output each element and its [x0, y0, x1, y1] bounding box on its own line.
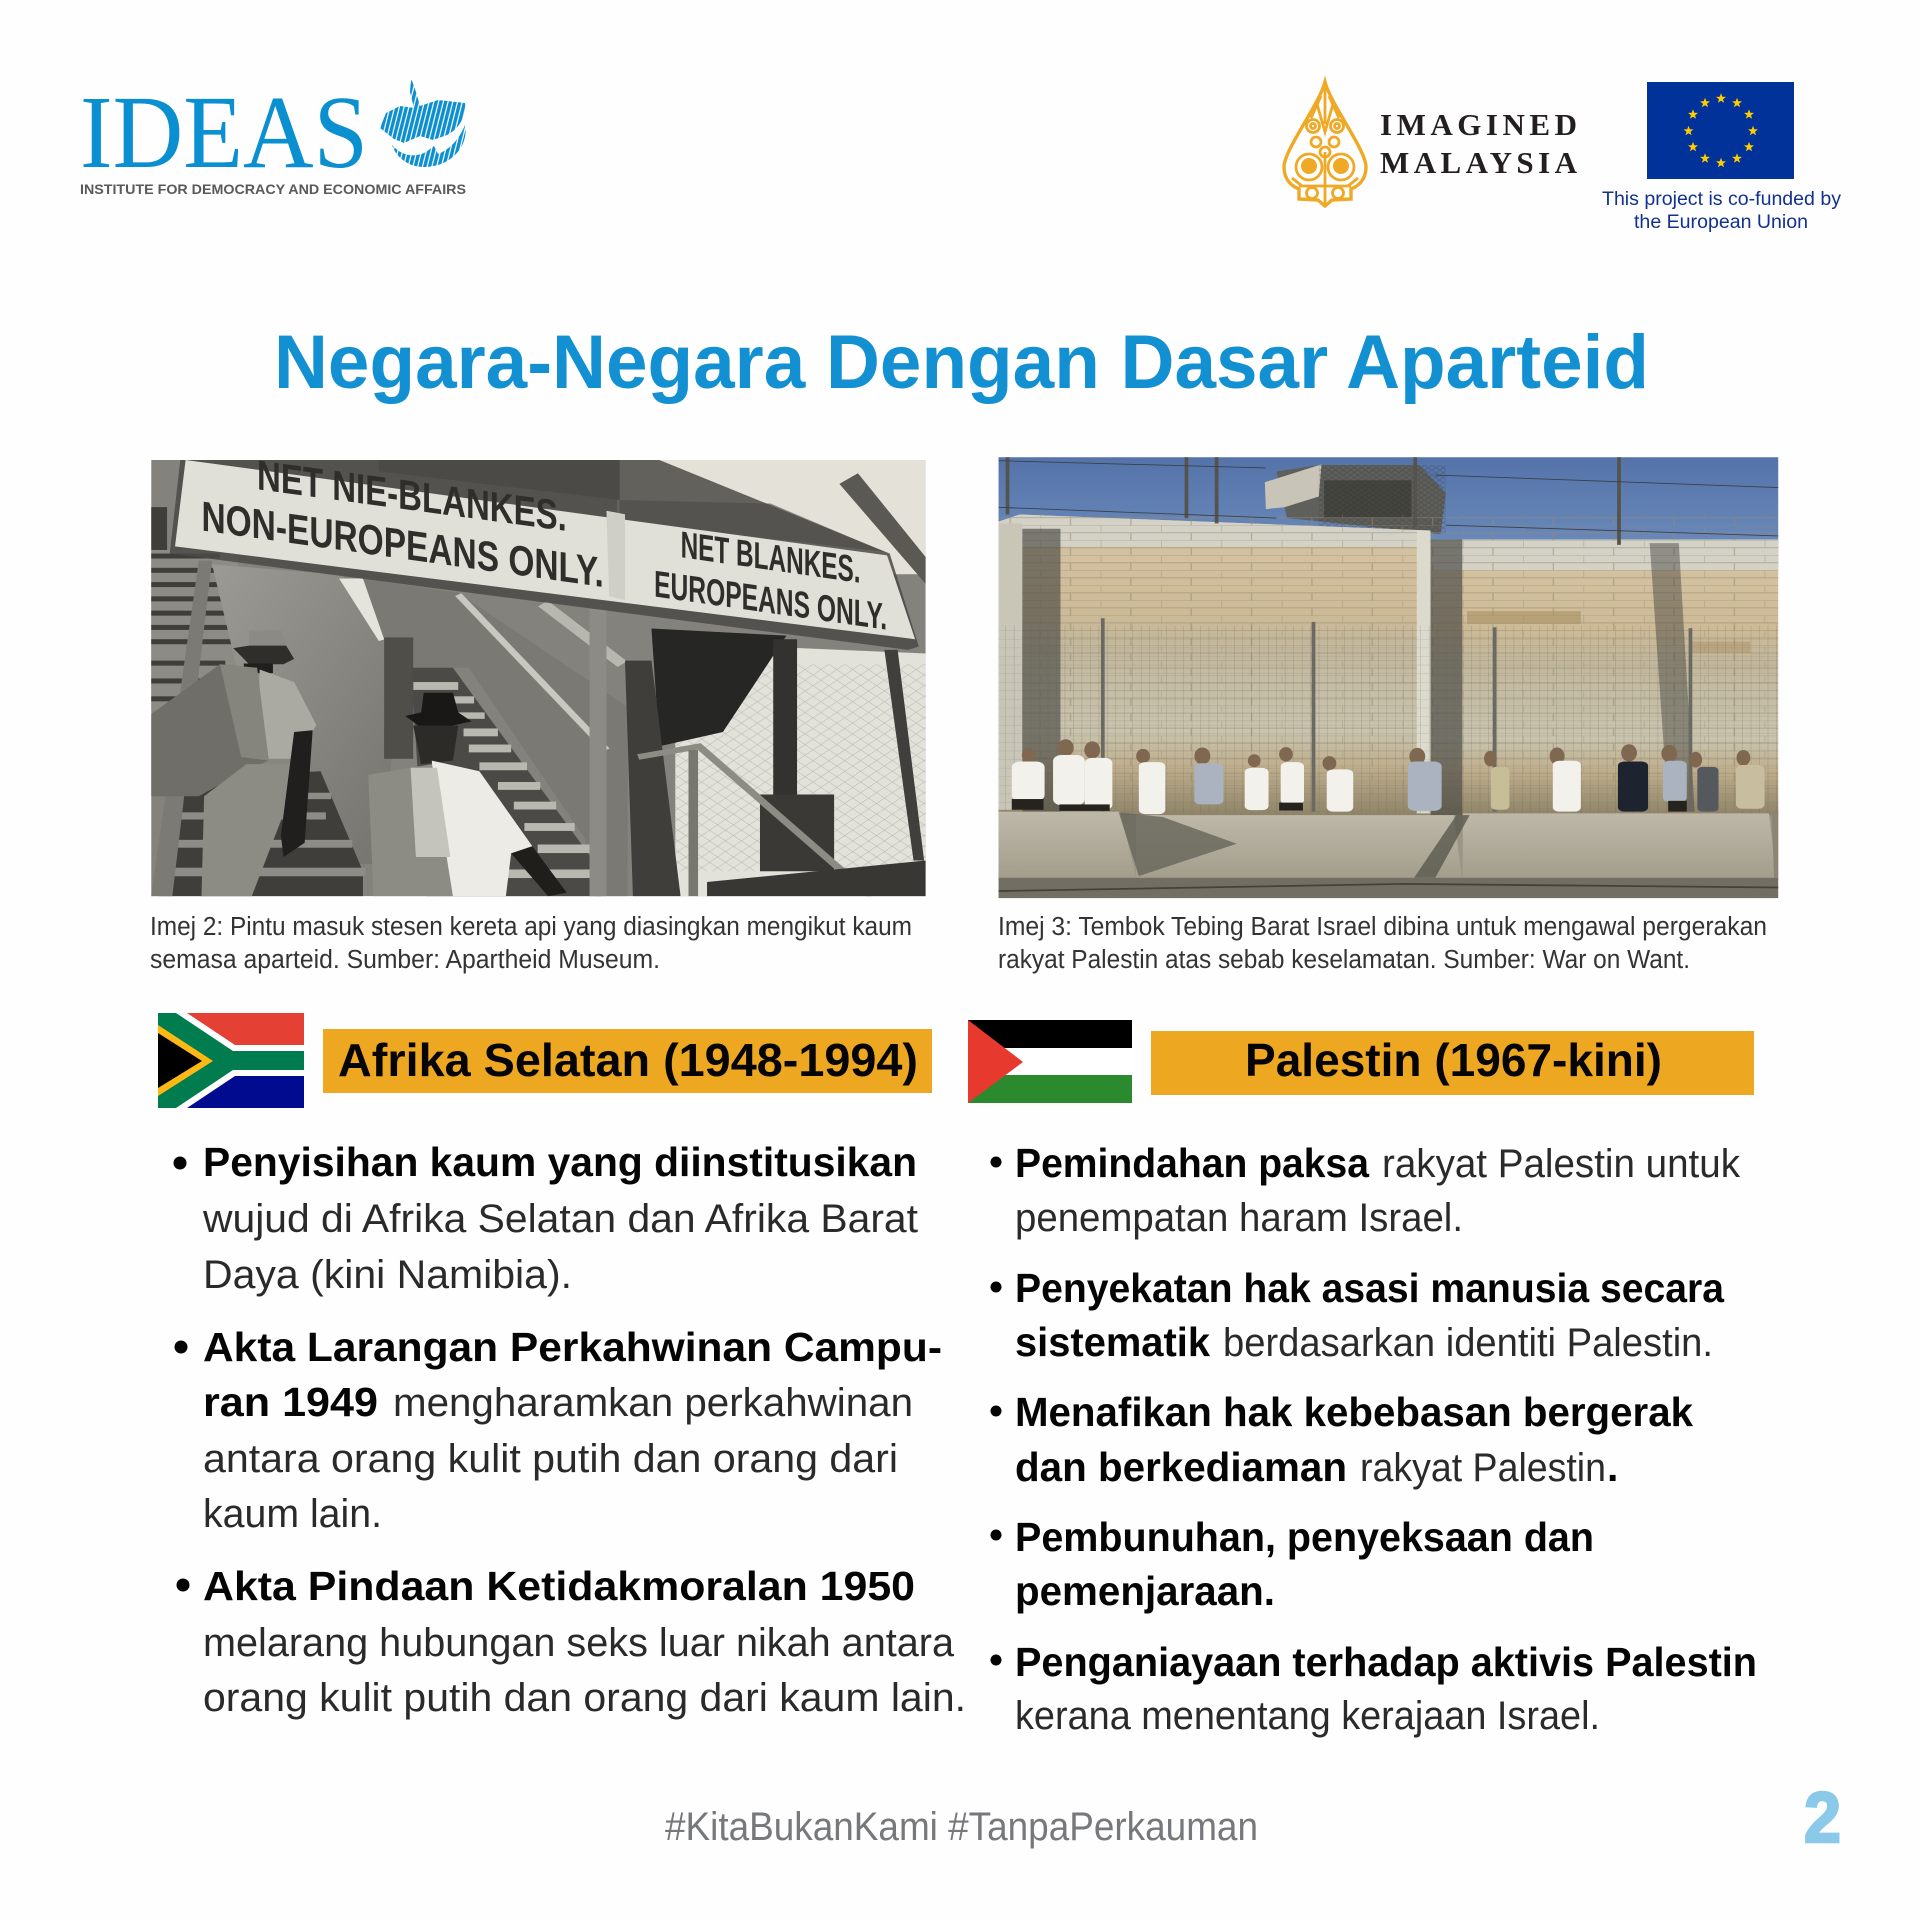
page number: 2: [1804, 1779, 1841, 1858]
logo tagline: INSTITUTE FOR DEMOCRACY AND ECONOMIC AFFAIRS: [80, 181, 466, 197]
photo: station entrance under apartheid: NET NIE-BLANKES.: [257, 452, 567, 540]
caption: image 2: semasa aparteid. Sumber: Apartheid Museum.: [150, 946, 660, 974]
wall sections: [999, 514, 1778, 880]
icon: gold teardrop ornament: [1284, 82, 1366, 206]
bullet: persecution of activists: [990, 1639, 1757, 1738]
bullet: forced displacement: penempatan haram Israel.: [1015, 1196, 1463, 1240]
EU funding note: the European Union: [1634, 212, 1808, 233]
sign board: [170, 460, 919, 650]
heading: Afrika Selatan: Afrika Selatan (1948-1994): [338, 1034, 918, 1086]
bullet: persecution of activists: kerana menentang kerajaan Israel.: [1015, 1694, 1600, 1738]
bullet: mixed marriages act: ran 1949: [203, 1379, 378, 1425]
photo: West Bank wall: [999, 457, 1778, 898]
panel: South Africa points: [174, 1139, 966, 1720]
EU funding note: This project is co-funded by: [1602, 189, 1842, 210]
man with hat at left: [151, 630, 316, 896]
caption: image 3: [998, 913, 1767, 974]
bullet: immorality amendment act: Akta Pindaan Ketidakmoralan 1950: [203, 1563, 915, 1609]
hashtags: #KitaBukanKami #TanpaPerkauman: [665, 1805, 1258, 1849]
logo: Imagined Malaysia: [1284, 82, 1578, 206]
bullet: immorality amendment act: orang kulit putih dan orang dari kaum lain.: [203, 1676, 966, 1720]
bullet: freedom of movement: rakyat Palestin: [1360, 1446, 1606, 1490]
bullet: forced displacement: Pemindahan paksa: [1015, 1140, 1370, 1186]
caption: image 3: Imej 3: Tembok Tebing Barat Israel dibina untuk mengawal pergerakan: [998, 913, 1767, 941]
photo: station entrance under apartheid: [151, 452, 926, 896]
EU funding note: [1602, 189, 1842, 233]
heading: Palestin: [1151, 1031, 1754, 1095]
photo: station entrance under apartheid: EUROPEANS ONLY.: [654, 563, 887, 638]
watch tower: [1265, 464, 1446, 534]
bullet: denial of human rights: Penyekatan hak asasi manusia secara: [1015, 1265, 1725, 1311]
bullet: freedom of movement: .: [1607, 1444, 1618, 1490]
left corrugated stairs: [151, 507, 239, 711]
caption: image 2: [150, 913, 912, 974]
bullet: immorality amendment act: melarang hubungan seks luar nikah antara: [203, 1621, 955, 1665]
bullet: mixed marriages act: kaum lain.: [203, 1492, 382, 1536]
man with hat at right: [368, 693, 567, 896]
bullet: denial of human rights: sistematik: [1015, 1319, 1210, 1365]
bullet: forced displacement: [990, 1140, 1741, 1240]
bullet: persecution of activists: Penganiayaan terhadap aktivis Palestin: [1015, 1639, 1757, 1685]
bullet: institutionalised segregation: Penyisihan kaum yang diinstitusikan: [203, 1139, 917, 1185]
bullet: mixed marriages act: antara orang kulit putih dan orang dari: [203, 1437, 898, 1481]
bullet: freedom of movement: dan berkediaman: [1015, 1444, 1347, 1490]
bullet: institutionalised segregation: Daya (kini Namibia).: [203, 1253, 572, 1297]
right structure: [675, 643, 926, 896]
icon: South Africa flag: [158, 1013, 304, 1108]
bullet: institutionalised segregation: wujud di Afrika Selatan dan Afrika Barat: [202, 1197, 918, 1241]
title: Negara-Negara Dengan Dasar Aparteid: [274, 320, 1649, 405]
logo: IDEAS: IDEAS: [80, 75, 368, 190]
bullet: mixed marriages act: mengharamkan perkahwinan: [393, 1381, 913, 1425]
panel: Palestine points: [990, 1140, 1757, 1738]
logo: European Union flag: [1647, 82, 1794, 179]
bullet: denial of human rights: [990, 1265, 1725, 1365]
icon: striped dove globe: [380, 78, 466, 167]
caption: image 3: rakyat Palestin atas sebab keselamatan. Sumber: War on Want.: [998, 946, 1690, 974]
bullet: killing and torture: pemenjaraan.: [1015, 1568, 1275, 1614]
fence mesh and posts: [999, 457, 1778, 813]
bullet: denial of human rights: berdasarkan identiti Palestin.: [1223, 1321, 1713, 1365]
lower-left stairs: [159, 771, 363, 896]
wordmark: IMAGINED: [1380, 107, 1577, 142]
post and dark beam: [151, 561, 212, 896]
ground: [999, 878, 1778, 898]
bullet: mixed marriages act: Akta Larangan Perkahwinan Campu-: [203, 1324, 942, 1370]
concrete barriers: [999, 812, 1778, 878]
bullet: freedom of movement: [990, 1389, 1693, 1490]
bullet: killing and torture: Pembunuhan, penyeksaan dan: [1015, 1514, 1594, 1560]
bullet: freedom of movement: Menafikan hak kebebasan bergerak: [1015, 1389, 1693, 1435]
icon: Palestine flag: [968, 1020, 1132, 1103]
centre stairs: [411, 668, 601, 896]
bullet: mixed marriages act: [174, 1324, 942, 1536]
photo: station entrance under apartheid: NET BLANKES.: [681, 524, 861, 592]
heading: Palestin: Palestin (1967-kini): [1245, 1034, 1662, 1086]
logo: Imagined Malaysia: MALAYSIA: [1380, 145, 1578, 180]
bullet: immorality amendment act: [176, 1563, 966, 1720]
bullet: killing and torture: [990, 1514, 1594, 1614]
photo: station entrance under apartheid: NON-EUROPEANS ONLY.: [201, 493, 604, 596]
caption: image 2: Imej 2: Pintu masuk stesen kereta api yang diasingkan mengikut kaum: [150, 913, 912, 941]
line of walking people: [1012, 739, 1765, 814]
bullet: institutionalised segregation: [174, 1139, 918, 1297]
bullet: forced displacement: rakyat Palestin untuk: [1382, 1142, 1741, 1186]
